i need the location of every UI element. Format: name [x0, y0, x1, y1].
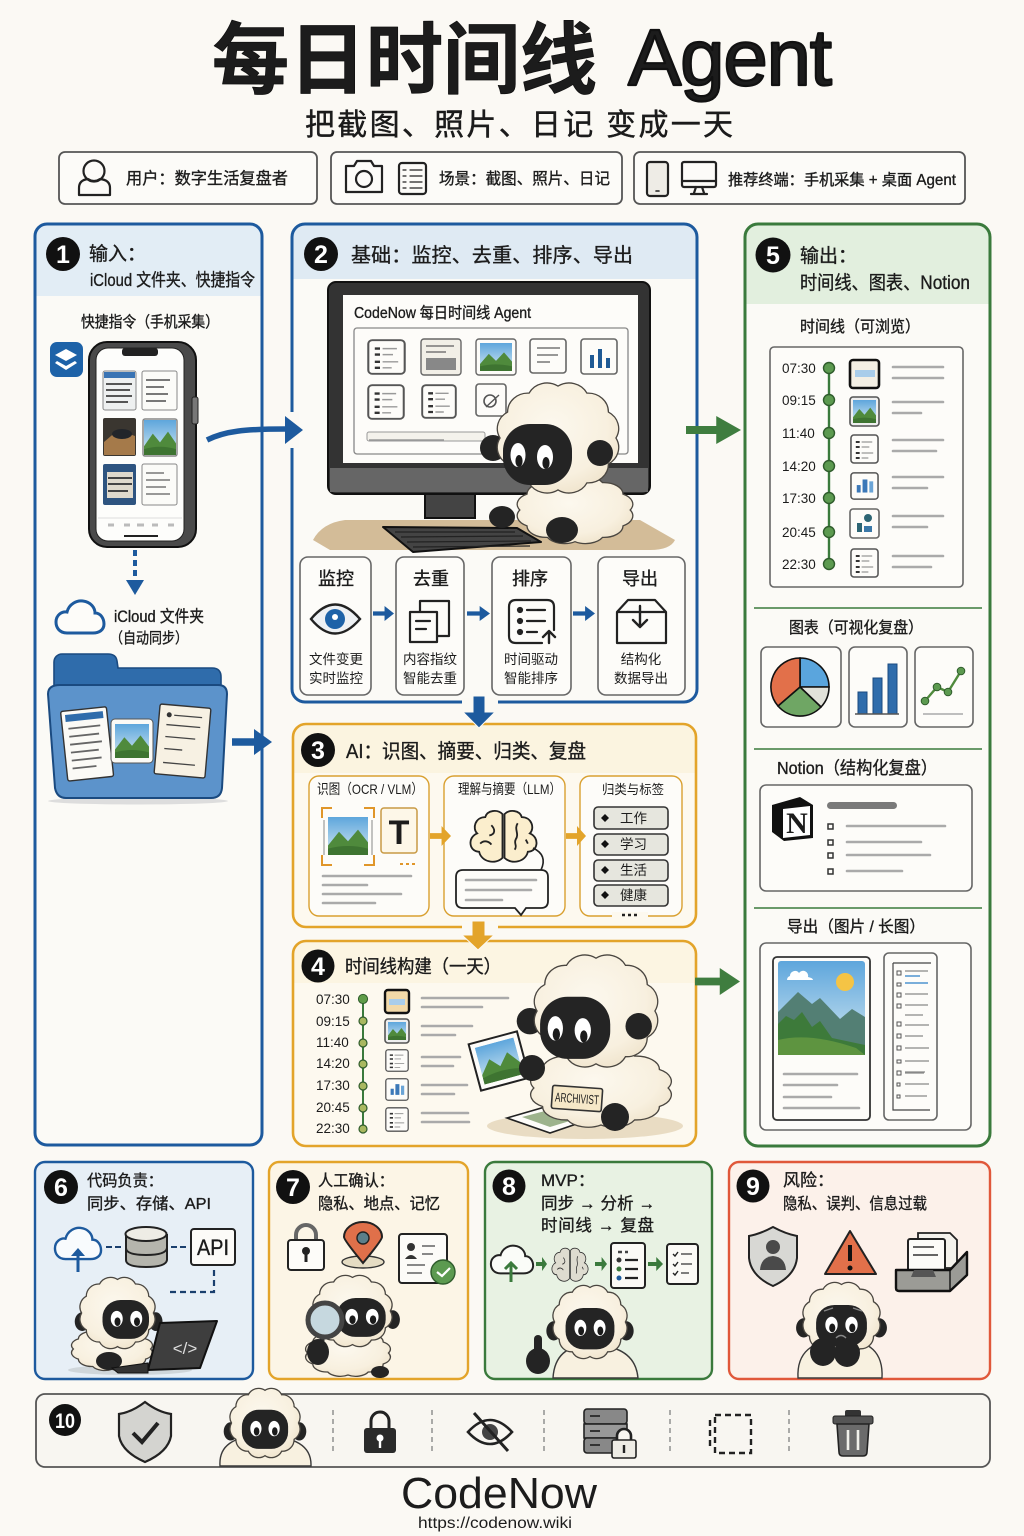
- section: Notion: [760, 758, 972, 891]
- badge 8: 8: [502, 1173, 516, 1201]
- heading 1: 输入：: [89, 243, 146, 265]
- heading 8: [541, 1171, 655, 1235]
- heading 8: 时间线 → 复盘: [541, 1216, 654, 1235]
- times: 22:30: [782, 557, 816, 572]
- heading 8: MVP：: [541, 1171, 595, 1190]
- badge 6: [44, 1170, 78, 1204]
- badge 3: [301, 733, 335, 767]
- arrow: [536, 1257, 547, 1271]
- title: Agent: [628, 13, 832, 102]
- screen heading: CodeNow 每日时间线 Agent: [354, 304, 532, 322]
- subcard: OCR: [309, 776, 429, 916]
- heading 5: [800, 245, 970, 294]
- step card: monitor: 实时监控: [309, 671, 363, 686]
- section: charts: [761, 618, 973, 727]
- panel 3 header band: [293, 724, 696, 773]
- speech bubble: [456, 870, 548, 915]
- subcard: tags: 学习: [620, 837, 647, 852]
- section: export: [760, 918, 971, 1130]
- heading 4: 时间线构建（一天）: [345, 956, 501, 977]
- arrow: panel 2 to panel 3: [462, 696, 498, 728]
- icon: padlock: [288, 1225, 324, 1270]
- panel 1 header band: [35, 224, 262, 296]
- desktop monitor illustration: [313, 282, 675, 550]
- panel 3: AI: [293, 724, 696, 927]
- thumbnails: [850, 360, 879, 577]
- arrow: [430, 826, 451, 846]
- icon: Notion logo: N: [786, 807, 808, 840]
- icon: phone: [647, 162, 668, 196]
- panel 4 header band: [293, 941, 696, 983]
- chip: devices: 推荐终端：手机采集 + 桌面 Agent: [728, 171, 957, 189]
- folder illustration: [48, 654, 228, 804]
- arrow: [595, 1257, 607, 1271]
- badge 8: [492, 1170, 526, 1202]
- arrow: phone to panel 2: [207, 412, 303, 448]
- icon: cloud upload: [55, 1228, 101, 1272]
- rail: [824, 362, 834, 570]
- section: timeline: [770, 318, 963, 587]
- icon: sorted list: [509, 600, 555, 643]
- heading 9: [783, 1171, 927, 1213]
- panel 8: MVP: [485, 1162, 712, 1379]
- subcard: LLM: [444, 776, 565, 916]
- icon: warning: [825, 1231, 876, 1274]
- badge 9: [736, 1170, 770, 1202]
- subcard: tags: 健康: [620, 887, 648, 903]
- icon: API box: [191, 1229, 235, 1265]
- chip: user: [59, 152, 317, 204]
- arrow: panel 4 to panel 5: [695, 968, 740, 995]
- arrow: folder to panel 3: [232, 729, 272, 755]
- heading 5: 输出：: [800, 245, 857, 267]
- icon: camera: [346, 161, 382, 192]
- timeline times: [316, 992, 350, 1136]
- step card: dedupe: 去重: [413, 569, 449, 589]
- pie chart: [761, 647, 841, 727]
- badge 10: [49, 1404, 81, 1436]
- icon: Notion logo: [772, 797, 813, 841]
- step card: sort: 智能排序: [504, 671, 558, 686]
- icon: shield check: [119, 1402, 171, 1462]
- keyboard: [383, 527, 541, 552]
- step card: monitor: 文件变更: [309, 652, 363, 667]
- panel 7: human confirm: [269, 1162, 468, 1379]
- times: 14:20: [782, 459, 816, 474]
- step card: sort: [492, 557, 571, 695]
- subcard: tags: 工作: [620, 811, 647, 826]
- icon: checklist: [667, 1244, 698, 1284]
- sheep mascot: laptop: [68, 1277, 217, 1375]
- heading 6: 代码负责：: [87, 1172, 163, 1190]
- label: shortcuts: 快捷指令（手机采集）: [81, 313, 219, 331]
- section: charts: 图表（可视化复盘）: [789, 618, 923, 637]
- step card: dedupe: 内容指纹: [403, 651, 457, 667]
- timeline rail: [358, 994, 368, 1133]
- timeline times: 07:30: [316, 992, 350, 1007]
- icon: copies: [410, 601, 449, 642]
- badge 7: 7: [286, 1174, 300, 1202]
- badge 5: 5: [766, 242, 780, 270]
- section: timeline: 时间线（可浏览）: [800, 318, 920, 336]
- icon: shield person: [749, 1227, 797, 1286]
- label: iCloud folder: iCloud 文件夹: [114, 607, 204, 626]
- times: 09:15: [782, 393, 816, 408]
- badge 4: 4: [311, 953, 325, 981]
- icon: eye: [311, 604, 360, 634]
- timeline times: 14:20: [316, 1056, 350, 1071]
- footer url: https://codenow.wiki: [418, 1515, 572, 1532]
- icon: desktop: [682, 162, 716, 194]
- times: 11:40: [782, 426, 815, 441]
- timeline text lines: [422, 998, 508, 1122]
- timeline times: 09:15: [316, 1014, 350, 1029]
- sheep mascot: archivist: ARCHIVIST: [554, 1089, 599, 1108]
- arrow: [573, 606, 595, 621]
- icon: trash: [833, 1410, 873, 1456]
- arrow: [566, 826, 586, 846]
- sheep mascot: at computer: [480, 383, 633, 544]
- heading 2: 基础：监控、去重、排序、导出: [351, 244, 633, 267]
- arrow: [467, 606, 490, 621]
- panel 4: timeline build: [293, 941, 696, 1146]
- label: iCloud folder: （自动同步）: [110, 630, 188, 647]
- icon: brain: [552, 1248, 588, 1281]
- badge 10: 10: [55, 1410, 75, 1433]
- icon: lock: [364, 1412, 396, 1453]
- badge 9: 9: [746, 1173, 760, 1201]
- bar chart: [849, 647, 907, 727]
- label: iCloud folder: [110, 607, 204, 647]
- heading 1: iCloud 文件夹、快捷指令: [90, 270, 255, 290]
- export: long image card: [884, 953, 937, 1120]
- heading 3: AI：识图、摘要、归类、复盘: [346, 740, 586, 763]
- badge 7: [276, 1170, 310, 1204]
- badge 2: [304, 237, 338, 271]
- heading 8: 同步 → 分析 →: [541, 1194, 655, 1213]
- chip: devices: [634, 152, 965, 204]
- heading 1: [89, 243, 255, 290]
- arrow: [648, 1257, 663, 1271]
- heading 6: [87, 1172, 211, 1213]
- icon: list: [611, 1243, 645, 1288]
- heading 9: 隐私、误判、信息过载: [783, 1195, 927, 1213]
- icon: API box: API: [197, 1235, 229, 1260]
- section: export: 导出（图片 / 长图）: [787, 918, 925, 936]
- arrow: panel 2 to panel 5: [686, 416, 741, 444]
- times: 20:45: [782, 525, 816, 540]
- step card: sort: 时间驱动: [504, 652, 558, 667]
- times: [782, 361, 816, 572]
- times: 17:30: [782, 491, 816, 506]
- heading 9: 风险：: [783, 1171, 834, 1190]
- sheep mascot: worried: [796, 1282, 887, 1378]
- chip: scene: [331, 152, 622, 204]
- panel 2: foundation: [292, 224, 697, 702]
- badge 1: 1: [56, 241, 70, 269]
- screen window: [354, 328, 628, 454]
- times: 07:30: [782, 361, 816, 376]
- timeline times: 17:30: [316, 1078, 350, 1093]
- phone illustration: [89, 342, 198, 547]
- line chart: [915, 647, 973, 727]
- subcard: LLM: 理解与摘要（LLM）: [458, 781, 561, 797]
- icon: dashed frame: [710, 1415, 751, 1453]
- panel 5 header band: [745, 224, 990, 304]
- step card: monitor: 监控: [318, 569, 354, 589]
- sheep mascot: laptop: </>: [173, 1339, 197, 1358]
- step card: sort: 排序: [512, 569, 548, 589]
- step card: export: 导出: [622, 569, 658, 589]
- arrow: phone to cloud: [126, 550, 144, 595]
- icon: secure server: [584, 1409, 636, 1458]
- badge 3: 3: [311, 737, 325, 765]
- footer logo: CodeNow: [401, 1469, 597, 1518]
- icon: eye hidden: [468, 1413, 512, 1451]
- timeline times: 11:40: [316, 1035, 349, 1050]
- icon: map pin: [342, 1222, 384, 1268]
- badge 2: 2: [314, 241, 328, 269]
- icon: overflowing inbox: [896, 1233, 967, 1291]
- subtitle: 把截图、照片、日记 变成一天: [305, 109, 733, 142]
- icon: ID card check: [399, 1234, 455, 1284]
- heading 5: 时间线、图表、Notion: [800, 272, 970, 294]
- badge 6: 6: [54, 1174, 68, 1202]
- heading 6: 同步、存储、API: [87, 1195, 211, 1213]
- arrow: panel 3 to panel 4: [462, 921, 498, 950]
- icon: brain: [470, 811, 537, 862]
- step card: export: 数据导出: [614, 671, 668, 686]
- sheep mascot: archivist: [469, 955, 683, 1139]
- icon: cloud: [56, 601, 104, 633]
- panel 1: input: [35, 224, 262, 1145]
- panel 2 header band: [292, 224, 697, 279]
- subcard: tags: 生活: [620, 863, 647, 878]
- section: Notion: Notion（结构化复盘）: [777, 758, 937, 778]
- title: 每日时间线: [212, 16, 597, 104]
- sheep mascot: magnifier: [306, 1275, 400, 1378]
- badge 1: [46, 237, 80, 271]
- text lines: [893, 367, 943, 567]
- timeline times: 22:30: [316, 1121, 350, 1136]
- arrow: [373, 606, 394, 621]
- timeline thumbnails: [385, 990, 409, 1131]
- timeline times: 20:45: [316, 1100, 350, 1115]
- icon: database: [126, 1227, 167, 1267]
- icon: shortcuts: [50, 342, 83, 377]
- subcard: OCR: T: [389, 814, 410, 852]
- icon: notebook: [399, 163, 426, 194]
- panel 6: code: [35, 1162, 253, 1379]
- panel 9: risk: [729, 1162, 990, 1379]
- step card: export: 结构化: [621, 652, 661, 667]
- export: image card: [773, 957, 870, 1120]
- step card: dedupe: 智能去重: [403, 671, 457, 686]
- chip: scene: 场景：截图、照片、日记: [439, 170, 610, 188]
- sheep mascot: thumbs up: [526, 1285, 638, 1378]
- icon: cloud sync: [491, 1246, 533, 1282]
- subcard: OCR: 识图（OCR / VLM）: [317, 781, 423, 797]
- sheep mascot: guard: [220, 1388, 311, 1466]
- step card: export: [598, 557, 685, 695]
- step card: monitor: [300, 557, 371, 695]
- panel 5: output: [745, 224, 990, 1146]
- subcard: tags: 归类与标签: [602, 782, 664, 797]
- step card: dedupe: [396, 557, 464, 695]
- chip: user: 用户：数字生活复盘者: [126, 169, 288, 188]
- title: [212, 13, 832, 104]
- badge 4: [302, 950, 334, 982]
- icon: export box: [617, 600, 666, 643]
- heading 7: 人工确认：: [318, 1172, 394, 1190]
- heading 7: [318, 1172, 440, 1213]
- icon: person: [79, 160, 110, 195]
- panel 10: security strip: [36, 1388, 990, 1467]
- badge 5: [756, 238, 790, 272]
- subcard: tags: [580, 776, 682, 919]
- heading 7: 隐私、地点、记忆: [318, 1195, 440, 1213]
